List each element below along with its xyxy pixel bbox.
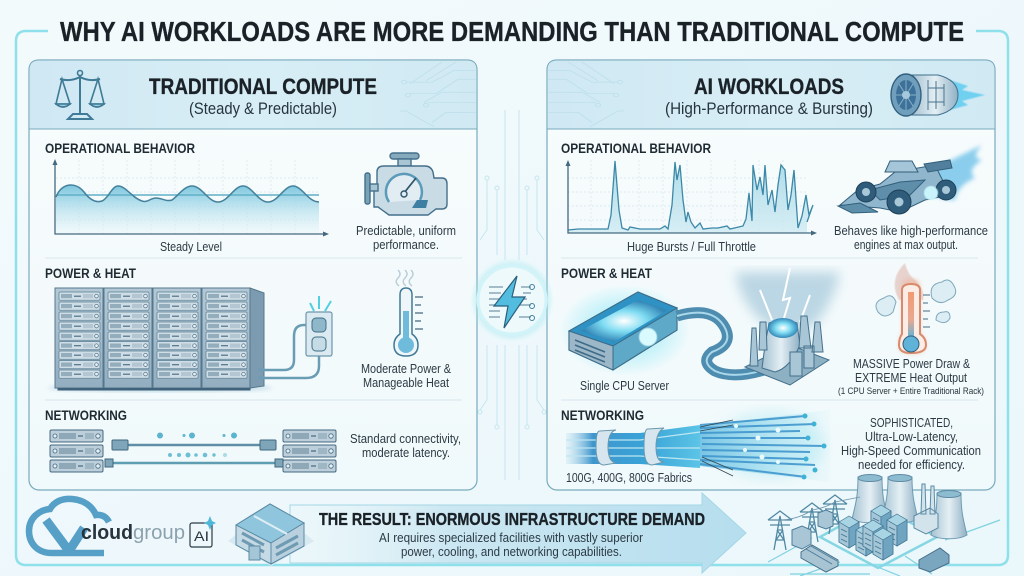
text: moderate power xyxy=(361,361,451,390)
result arrow xyxy=(290,493,746,573)
text: predictable performance: performance. xyxy=(373,237,439,252)
icon: engine gauge xyxy=(365,153,447,215)
section heading: power and heat: POWER & HEAT xyxy=(561,266,653,281)
logo: vcloudgroup AI: AI xyxy=(194,528,209,544)
section heading: networking: NETWORKING xyxy=(561,408,644,423)
result description xyxy=(379,530,644,559)
illustration: standard network link xyxy=(50,430,336,472)
illustration: fiber optic bundle xyxy=(566,410,830,482)
text: massive power draw xyxy=(838,356,984,397)
text: massive power draw: EXTREME Heat Output xyxy=(855,370,967,385)
illustration: server rack plugged into outlet xyxy=(48,288,332,392)
section heading: power and heat: POWER & HEAT xyxy=(45,266,137,281)
text: behaves like engines: engines at max output. xyxy=(854,237,958,252)
text: sophisticated networking: High-Speed Communication xyxy=(841,443,981,458)
section heading: operational behavior: OPERATIONAL BEHAVIOR xyxy=(561,141,711,156)
line chart: bursty workload xyxy=(566,160,817,236)
factory with stacks xyxy=(914,484,938,534)
text: predictable performance: Predictable, uniform xyxy=(356,223,456,238)
text: massive power draw: MASSIVE Power Draw & xyxy=(853,356,970,371)
text: sophisticated networking: needed for efficiency. xyxy=(858,457,965,472)
icon: data center building xyxy=(228,504,314,566)
section heading: networking: NETWORKING xyxy=(45,408,127,423)
text: standard connectivity: Standard connectivity, xyxy=(350,431,461,446)
text: moderate power: Manageable Heat xyxy=(363,375,449,390)
result description: power, cooling, and networking capabilities. xyxy=(401,544,622,559)
illustration: power and data center campus xyxy=(768,474,1000,576)
icon: jet turbine xyxy=(891,74,985,116)
chart label: fabrics: 100G, 400G, 800G Fabrics xyxy=(566,470,692,485)
panel: AI workloads xyxy=(547,60,995,490)
text: predictable performance xyxy=(356,223,456,252)
icon: balance scales xyxy=(56,70,104,119)
illustration: CPU server linked to power plant xyxy=(559,268,840,385)
icon: race car with flames xyxy=(838,145,982,214)
subheading: steady and predictable: (Steady & Predictable) xyxy=(189,100,337,118)
text: sophisticated networking xyxy=(841,415,981,472)
chart label: steady level: Steady Level xyxy=(160,239,222,254)
icon: thermometer extreme heat xyxy=(876,263,956,354)
text: behaves like engines xyxy=(834,223,988,252)
transmission towers xyxy=(768,511,792,550)
text: moderate power: Moderate Power & xyxy=(361,361,451,376)
logo: vcloudgroup AI xyxy=(29,499,216,553)
circuit traces xyxy=(768,505,1000,576)
subheading: high performance and bursting: (High-Performance & Bursting) xyxy=(665,100,873,118)
substation blocks xyxy=(792,510,833,549)
section heading: operational behavior: OPERATIONAL BEHAVIOR xyxy=(45,141,195,156)
line chart: steady level xyxy=(52,159,329,236)
CPU server xyxy=(559,284,691,376)
result description: AI requires specialized facilities with vastly superior xyxy=(379,530,644,545)
text: standard connectivity xyxy=(350,431,461,460)
result heading: THE RESULT: ENORMOUS INFRASTRUCTURE DEMAND xyxy=(319,509,705,529)
heading: AI workloads: AI WORKLOADS xyxy=(694,74,844,99)
text: sophisticated networking: SOPHISTICATED, xyxy=(870,415,953,430)
cooling towers xyxy=(852,474,888,523)
center circuit traces xyxy=(478,110,546,480)
icon: thermometer moderate xyxy=(394,270,423,356)
text: massive power draw: (1 CPU Server + Entire Traditional Rack) xyxy=(838,386,984,397)
chart label: huge bursts: Huge Bursts / Full Throttle xyxy=(627,239,756,254)
panel header: AI workloads xyxy=(547,60,995,129)
storm cloud and lightning xyxy=(735,268,840,335)
data center racks xyxy=(839,516,859,548)
text: sophisticated networking: Ultra-Low-Latency, xyxy=(865,429,958,444)
logo: vcloudgroup AI: cloud xyxy=(81,522,133,544)
heading: traditional compute: TRADITIONAL COMPUTE xyxy=(149,74,377,99)
panel: traditional compute xyxy=(29,60,477,490)
power plant xyxy=(745,316,829,385)
chart label: single CPU server: Single CPU Server xyxy=(580,378,670,393)
panel header: traditional compute xyxy=(29,60,477,129)
central lightning badge xyxy=(473,261,551,339)
logo: vcloudgroup AI: group xyxy=(133,522,185,544)
power cable bundle xyxy=(677,313,770,375)
text: behaves like engines: Behaves like high-performance xyxy=(834,223,988,238)
text: standard connectivity: moderate latency. xyxy=(362,445,450,460)
